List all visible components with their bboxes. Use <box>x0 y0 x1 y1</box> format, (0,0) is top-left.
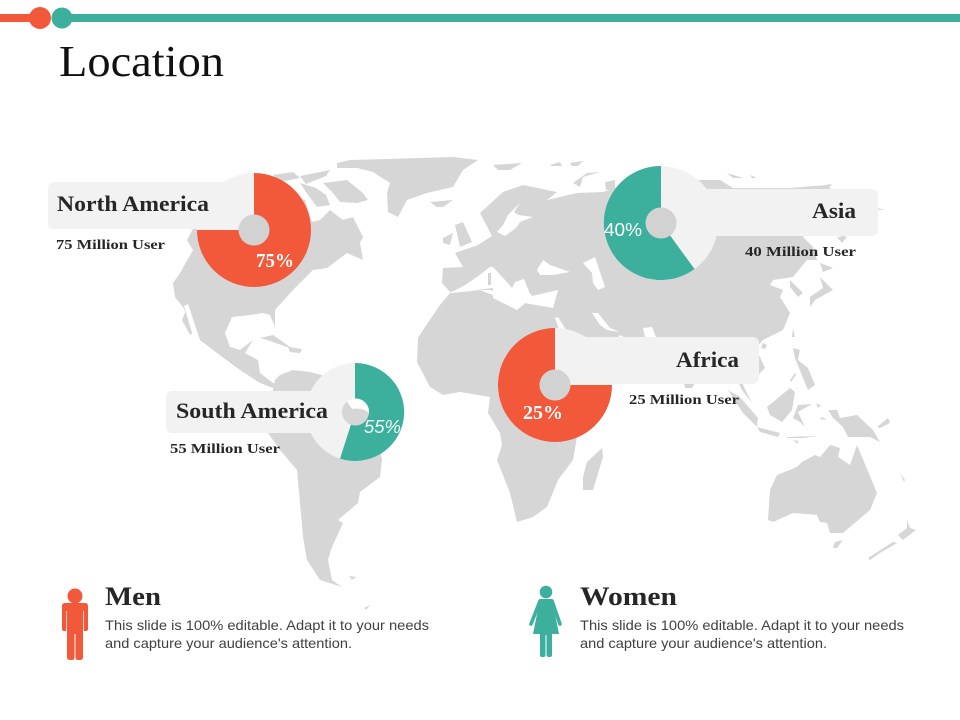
description: men: and capture your audience's attention. <box>105 635 352 651</box>
user count: 55 Million User <box>170 442 280 457</box>
world map <box>173 157 916 610</box>
ring value <box>340 363 404 461</box>
legend: men <box>62 582 429 660</box>
greenland <box>337 157 478 217</box>
australia <box>768 445 877 533</box>
user count: 75 Million User <box>56 238 165 253</box>
user count: 40 Million User <box>745 245 856 260</box>
donut: north america <box>48 173 311 287</box>
donut hub <box>238 214 270 246</box>
iceland <box>430 200 453 207</box>
icon: man <box>62 588 88 660</box>
description: women: This slide is 100% editable. Adapt it to your needs <box>580 617 904 633</box>
ring value arc <box>604 166 694 280</box>
donut: africa <box>498 328 759 442</box>
region name: Asia <box>812 198 856 223</box>
madagascar <box>583 448 603 490</box>
heading: men: Men <box>105 582 162 611</box>
region name: Africa <box>676 347 739 372</box>
africa <box>417 290 612 522</box>
ring remainder <box>555 328 612 385</box>
southeast asia islands <box>685 343 905 482</box>
percentage: 25% <box>523 402 563 424</box>
label panel: north america <box>48 182 255 229</box>
legend: women <box>531 582 904 657</box>
ring remainder <box>306 363 404 461</box>
donut: asia <box>604 166 878 280</box>
region name: South America <box>176 398 328 423</box>
label panel: south america <box>166 391 341 433</box>
heading: women: Women <box>580 582 678 611</box>
icon: woman <box>531 586 560 657</box>
top header bar <box>0 7 960 29</box>
donut hub <box>342 398 369 426</box>
kamchatka and far east islands <box>820 184 885 272</box>
user count: 25 Million User <box>629 393 739 408</box>
mediterranean land <box>488 262 536 294</box>
ring value <box>498 328 612 442</box>
donut hub <box>540 370 570 400</box>
label panel: asia <box>661 189 878 236</box>
eurasia <box>442 180 877 403</box>
title: Location <box>59 37 224 86</box>
percentage: 40% <box>604 220 642 240</box>
percentage: 75% <box>256 250 294 272</box>
percentage: 55% <box>364 417 401 437</box>
description: women: and capture your audience's attention. <box>580 635 827 651</box>
seas cut-outs <box>450 203 656 337</box>
region name: North America <box>57 191 209 216</box>
new zealand <box>868 520 916 560</box>
korea and japan <box>790 277 833 337</box>
ring remainder <box>197 173 254 230</box>
donut: south america <box>166 363 404 461</box>
ring remainder <box>604 166 718 280</box>
arctic islands <box>493 161 757 190</box>
british isles <box>443 222 472 247</box>
donut hub <box>646 208 676 238</box>
ring value 75% <box>197 173 311 287</box>
label panel: africa <box>555 337 759 384</box>
description: men: This slide is 100% editable. Adapt it to your needs <box>105 617 429 633</box>
south america <box>268 370 382 587</box>
